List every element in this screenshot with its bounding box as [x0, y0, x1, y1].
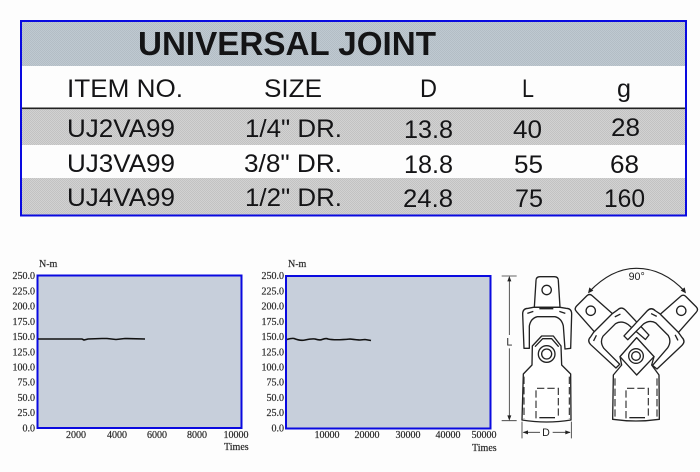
torque line: [287, 338, 371, 340]
x axis labels: Times: [472, 443, 497, 454]
y axis labels: 125.0: [12, 348, 35, 358]
row: UJ3VA99: [67, 150, 639, 179]
row 1 band: [21, 109, 686, 145]
row: UJ4VA99: UJ4VA99: [67, 184, 175, 212]
y axis labels: 50.0: [18, 393, 35, 404]
y axis labels: 75.0: [266, 378, 284, 388]
y axis labels: N-m: [288, 259, 307, 270]
y axis labels: 175.0: [12, 317, 35, 328]
row: UJ3VA99: UJ3VA99: [67, 150, 175, 178]
x axis labels: [66, 430, 249, 453]
drawing: straight joint with L and D dimensions: [502, 276, 572, 439]
dimension D: D: [542, 427, 550, 439]
drawing: joint articulated through 90 degrees: [564, 268, 700, 421]
row: UJ3VA99: 18.8: [404, 151, 453, 179]
y axis labels: 200.0: [262, 302, 284, 312]
y axis labels: 25.0: [18, 408, 35, 419]
chart: torque vs times, 0-10000: [12, 259, 249, 453]
x axis labels: 30000: [396, 430, 420, 441]
chart: torque vs times, 0-50000: [262, 259, 497, 454]
yoke with tang: [523, 277, 572, 349]
row: UJ2VA99: 28: [611, 114, 640, 142]
plot area: [286, 276, 490, 428]
dimension L: L: [506, 337, 512, 349]
table border: [21, 21, 686, 216]
left tilted yoke: [564, 284, 650, 369]
right tilted yoke: [623, 284, 700, 370]
y axis labels: 100.0: [12, 362, 35, 374]
table header: SIZE: [264, 75, 322, 103]
table header: [67, 75, 631, 103]
y axis labels: 200.0: [12, 302, 35, 312]
row: UJ4VA99: 160: [604, 185, 645, 213]
x axis labels: 10000: [314, 430, 340, 441]
y axis labels: 175.0: [262, 317, 284, 328]
x axis labels: 4000: [107, 430, 127, 441]
diagram: universal joint technical drawings: [502, 268, 700, 439]
y axis labels: 100.0: [262, 362, 284, 374]
row: UJ4VA99: 1/2" DR.: [245, 184, 342, 212]
row: UJ4VA99: 24.8: [403, 185, 453, 213]
y axis labels: [12, 259, 58, 434]
y axis labels: 50.0: [266, 393, 284, 404]
row: UJ2VA99: 1/4" DR.: [245, 115, 342, 143]
title: UNIVERSAL JOINT: [138, 25, 436, 62]
x axis labels: 50000: [472, 430, 496, 441]
x axis labels: 10000: [224, 430, 248, 441]
x axis labels: 20000: [354, 430, 380, 441]
y axis labels: 75.0: [18, 378, 35, 388]
y axis labels: N-m: [39, 259, 58, 270]
90 degree arc arrow: 90°: [629, 271, 645, 283]
row: UJ4VA99: 75: [515, 185, 543, 213]
x axis labels: 40000: [436, 430, 460, 441]
dimension L: [502, 276, 517, 421]
row: UJ3VA99: 55: [514, 151, 543, 179]
row: UJ4VA99: [67, 184, 645, 213]
lower socket body: [522, 336, 571, 422]
table header: D: [420, 75, 437, 103]
y axis labels: 225.0: [262, 286, 284, 298]
table header: g: [617, 75, 631, 103]
y axis labels: 250.0: [12, 271, 35, 282]
row: UJ2VA99: 13.8: [404, 116, 453, 144]
row: UJ3VA99: 68: [610, 151, 639, 179]
90 degree arc arrow: [588, 268, 686, 293]
torque line: [38, 338, 145, 340]
panel: specification table: [21, 21, 686, 216]
y axis labels: 225.0: [12, 286, 35, 298]
x axis labels: 6000: [147, 430, 167, 441]
x axis labels: 2000: [66, 430, 86, 441]
y axis labels: 125.0: [262, 348, 284, 358]
x axis labels: [314, 430, 497, 454]
y axis labels: 0.0: [22, 424, 35, 434]
row: UJ3VA99: 3/8" DR.: [244, 150, 342, 178]
plot area: [38, 276, 242, 428]
lower socket body with diamond head: [613, 338, 659, 421]
x axis labels: Times: [224, 442, 249, 453]
row: UJ2VA99: UJ2VA99: [67, 115, 175, 143]
y axis labels: 150.0: [12, 332, 35, 343]
row: UJ2VA99: [67, 114, 640, 144]
row 3 band: [21, 178, 686, 215]
y axis labels: 25.0: [266, 408, 284, 419]
y axis labels: [262, 259, 307, 434]
row: UJ2VA99: 40: [513, 116, 542, 144]
y axis labels: 250.0: [262, 271, 284, 282]
table header: L: [522, 75, 534, 103]
y axis labels: 150.0: [262, 332, 284, 343]
y axis labels: 0.0: [272, 424, 284, 434]
x axis labels: 8000: [187, 430, 207, 441]
dimension D: [522, 422, 571, 439]
table header: ITEM NO.: [67, 75, 183, 103]
title band: [21, 21, 686, 66]
